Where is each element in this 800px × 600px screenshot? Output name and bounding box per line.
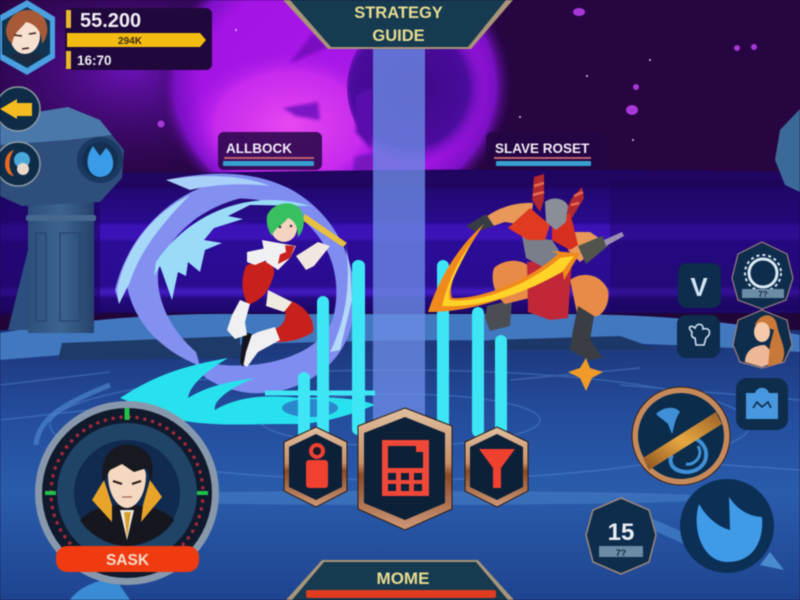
arms [247, 244, 286, 265]
title banner: strategy guide: GUIDE [372, 27, 425, 45]
energy bars [298, 260, 507, 442]
head [271, 214, 297, 242]
background: purple vortex glow [0, 0, 513, 230]
torso [262, 240, 296, 270]
stats panel: 294K [118, 36, 143, 47]
sword [302, 214, 347, 247]
player label: ALLBOCK [218, 132, 322, 170]
button: cloud icon [677, 315, 720, 358]
name pill [56, 546, 199, 572]
bottom badge: calculator icon [358, 408, 452, 530]
scarf [508, 208, 550, 240]
orange blade slash [428, 224, 580, 312]
stats panel [65, 8, 212, 70]
button: gear badge [732, 242, 793, 309]
title banner: strategy guide [283, 0, 513, 49]
badge: level 15 [586, 498, 656, 574]
name pill: SASK [106, 552, 150, 569]
bottom badge: person icon [284, 427, 347, 507]
icon: hero portrait [80, 444, 174, 546]
horns [532, 174, 544, 212]
bottom banner: mome: MOME [377, 569, 429, 588]
player label: SLAVE ROSET: SLAVE ROSET [495, 141, 590, 156]
back boot [485, 300, 512, 331]
thighs [493, 261, 532, 304]
background: space sky [0, 0, 800, 175]
button: bronze ring skill [632, 387, 730, 485]
background: arena wall [0, 170, 800, 316]
helmet [545, 199, 568, 230]
ground spark [568, 358, 603, 391]
button: bag icon [736, 378, 788, 430]
background: arena floor [0, 314, 800, 600]
skirt [527, 258, 572, 320]
button: V [678, 263, 721, 308]
badge: level 15: 7? [616, 548, 626, 558]
right pillar [775, 109, 800, 192]
background: stars [158, 8, 757, 141]
portrait badge [733, 310, 792, 368]
right arm [568, 232, 602, 262]
bottom banner: mome [286, 560, 514, 600]
button: main attack [680, 479, 784, 573]
bottom badge: funnel icon [465, 427, 528, 507]
torso [522, 236, 560, 268]
front leg [242, 261, 274, 305]
button: gear badge: 7? [758, 290, 768, 299]
character: green-haired fighter [227, 203, 347, 367]
player label: SLAVE ROSET [486, 132, 602, 170]
badge: level 15: 15 [608, 519, 634, 546]
player label: ALLBOCK: ALLBOCK [226, 141, 292, 156]
front boot [570, 306, 603, 360]
stats panel: 55.200 [80, 10, 141, 32]
player avatar [0, 0, 55, 75]
character: horned warrior [466, 174, 624, 360]
center light column [373, 48, 425, 438]
title banner: strategy guide: STRATEGY [354, 4, 443, 22]
left pillar [0, 107, 124, 333]
blue energy swirl [115, 174, 375, 425]
back arrow button [0, 87, 40, 131]
icon: pillar flame disc [88, 146, 113, 177]
button: V: V [690, 272, 708, 302]
left arm [486, 203, 533, 227]
stats panel: 16:70 [77, 53, 112, 68]
back leg [272, 300, 313, 342]
hero dial: SASK [35, 401, 219, 585]
floor wave [120, 358, 375, 425]
character switch button [0, 142, 40, 186]
